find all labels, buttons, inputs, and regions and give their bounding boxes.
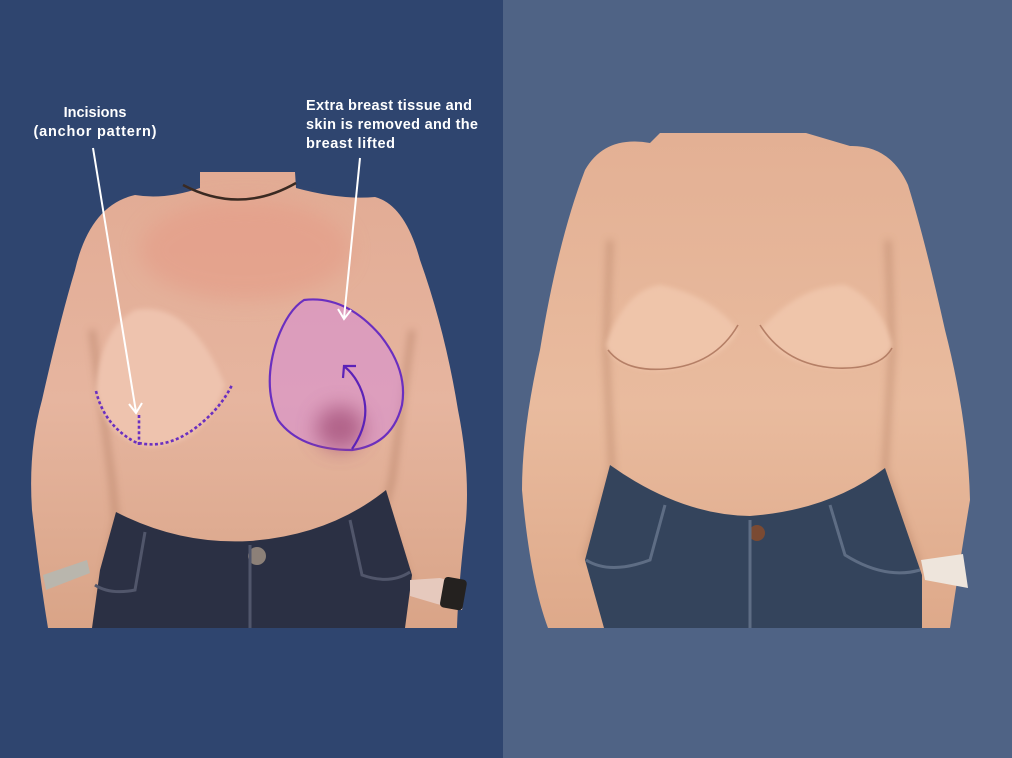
chest flush before <box>140 200 350 300</box>
label: incisions <box>34 105 157 140</box>
left contour before <box>96 309 225 447</box>
jeans seam after <box>586 505 920 628</box>
curved lift arrow <box>343 366 365 449</box>
watch face before <box>439 576 467 611</box>
panel: after background <box>503 0 1012 758</box>
watch before <box>410 578 466 610</box>
watch after <box>921 554 968 588</box>
label: tissue removed <box>306 98 478 152</box>
dotted incision lines <box>96 385 232 446</box>
jeans button before <box>248 547 266 565</box>
jeans seam before <box>95 520 410 628</box>
text: line one: Extra breast tissue and <box>306 98 472 114</box>
jeans before <box>92 490 412 628</box>
arrow: tissue removed <box>338 158 360 319</box>
shaded tissue area <box>316 406 364 450</box>
text: line two: skin is removed and the <box>306 117 478 133</box>
bracelet <box>43 560 90 590</box>
arm shading before <box>92 330 412 600</box>
text: line three: breast lifted <box>306 136 395 152</box>
arm shading after <box>586 240 920 570</box>
jeans after <box>585 465 922 628</box>
crease lines after <box>608 325 892 369</box>
purple tissue overlay <box>270 299 403 450</box>
necklace <box>183 183 296 200</box>
text: anchor pattern: (anchor pattern) <box>34 124 157 140</box>
panel: after figure <box>522 133 970 628</box>
text: incisions heading: Incisions <box>64 105 126 121</box>
panel: before background <box>0 0 503 758</box>
left contour after <box>606 285 738 370</box>
arrow: incisions <box>93 148 142 413</box>
right contour after <box>760 285 892 368</box>
torso after <box>522 133 970 628</box>
jeans button after <box>749 525 765 541</box>
panel: before figure <box>31 172 467 628</box>
torso before <box>31 172 467 628</box>
